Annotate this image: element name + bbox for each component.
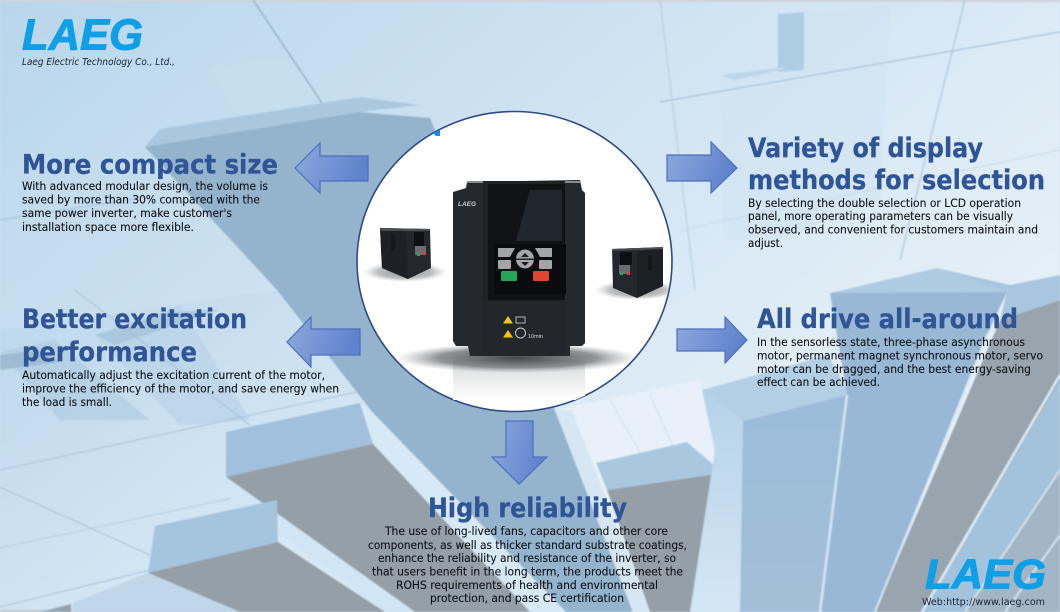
feature: high reliability [368,493,687,605]
company name: Laeg Electric Technology Co., Ltd., [22,57,175,68]
feature: better excitation [22,304,339,409]
photo: main inverter reflection and shadow [453,360,585,400]
body text [748,196,1038,250]
body text: The use of long-lived fans, capacitors and other core [384,524,668,538]
body text: saved by more than 30% compared with the [22,192,260,206]
body text [757,335,1043,389]
body text: same power inverter, make customer's [22,206,232,220]
feature: variety of display [748,133,1045,250]
body text: panel, more operating parameters can be visually [748,209,1013,223]
feature: all drive all-around [757,304,1043,389]
photo: main inverter body [453,180,585,356]
body text: enhance the reliability and resistance of the inverter, so [378,551,676,565]
arrow: left to compact size [295,143,368,193]
warning labels [503,316,543,340]
logo: top left [22,10,175,68]
body text: installation space more flexible. [22,220,194,234]
feature: more compact size [22,150,278,234]
photo: small inverter left [363,180,679,400]
body text [22,179,268,234]
photo: main inverter body: LAEG [458,201,476,208]
body text: With advanced modular design, the volume is [22,179,268,193]
arrow: right to all drive [677,317,747,363]
body text: In the sensorless state, three-phase asynchronous [757,335,1025,349]
arrow: left to excitation [287,317,360,367]
body text: motor, permanent magnet synchronous motor, servo [757,348,1043,362]
logo: top left: LAEG [22,10,143,60]
body text [22,368,339,409]
feature: high reliability: High reliability [428,493,627,524]
keypad [498,248,552,281]
body text: motor can be dragged, and the best energy-saving [757,362,1031,376]
warning labels: 10min [528,334,543,340]
body text: components, as well as thicker standard substrate coatings, [368,538,687,552]
website: Web:http://www.laeg.com [922,597,1045,608]
body text: ROHS requirements of health and environmental [396,578,658,592]
body text: protection, and pass CE certification [430,591,624,605]
arrow: down to reliability [492,421,547,484]
body text: observed, and convenient for customers maintain and [748,222,1038,236]
body text: By selecting the double selection or LCD operation [748,196,1021,210]
feature: all drive all-around: All drive all-around [757,304,1018,335]
body text: adjust. [748,236,783,250]
feature: variety of display: Variety of display [748,133,983,164]
photo: small inverter right [598,282,670,300]
feature: better excitation: performance [22,337,197,368]
body text: that users benefit in the long term, the products meet the [372,564,683,578]
arrow: right to display methods [667,142,737,193]
feature: better excitation: Better excitation [22,304,247,335]
feature: more compact size: More compact size [22,150,278,180]
body text [368,524,687,605]
logo: bottom right: LAEG [925,550,1046,598]
body text: effect can be achieved. [757,375,880,389]
body text: improve the efficiency of the motor, and save energy when [22,382,339,396]
body text: the load is small. [22,395,112,409]
product circle [357,112,679,412]
body text: Automatically adjust the excitation current of the motor, [22,368,325,382]
